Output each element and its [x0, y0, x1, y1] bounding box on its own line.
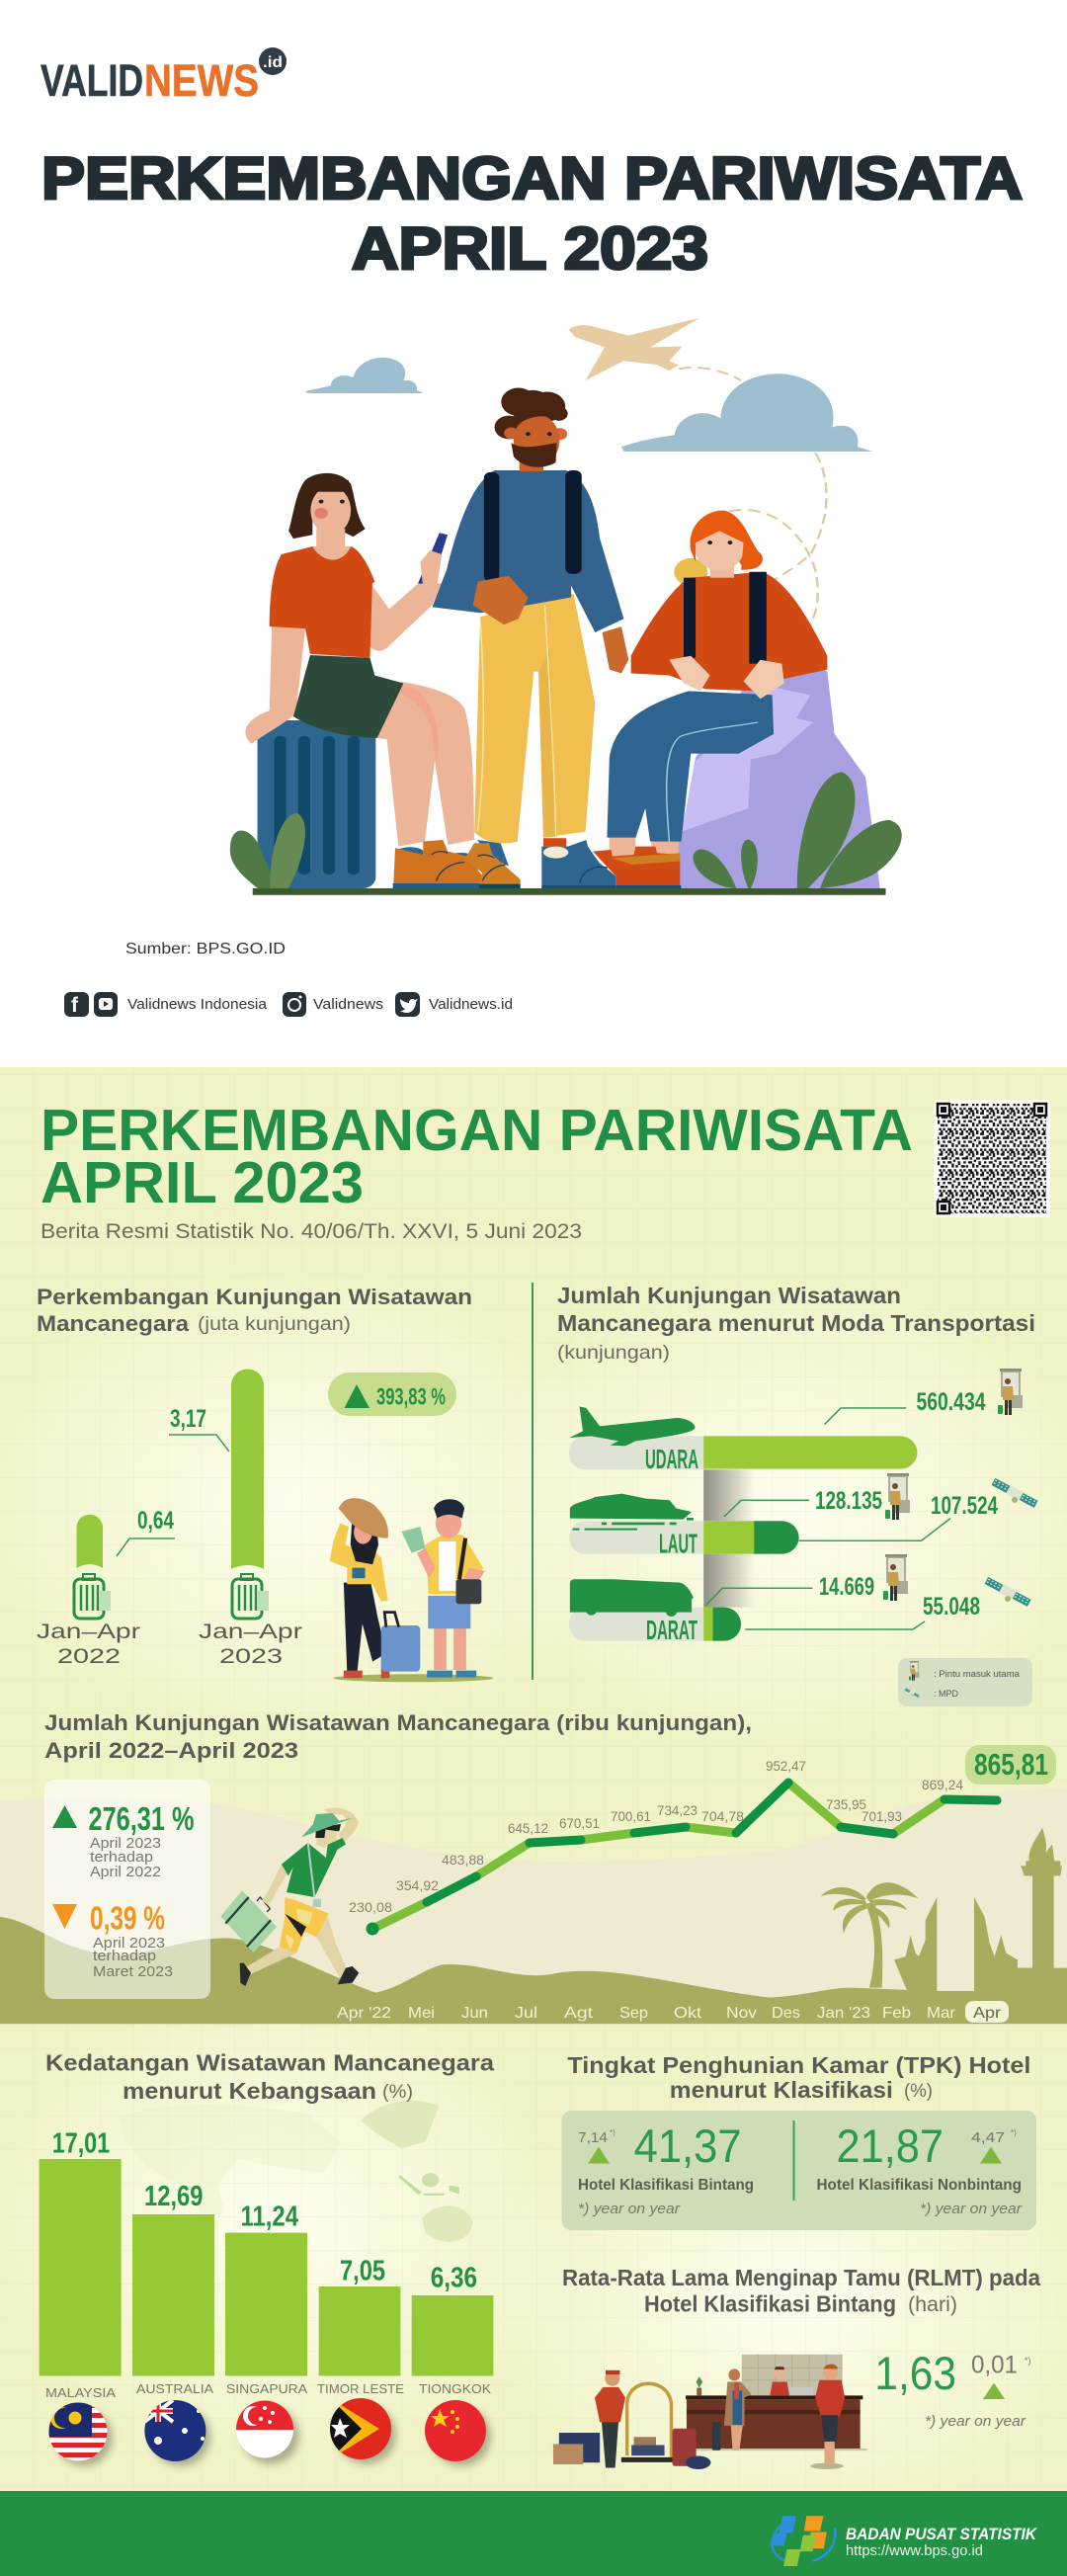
- axis label 2022: [37, 1620, 140, 1668]
- monument: [1021, 1827, 1062, 1969]
- source text: Sumber: BPS.GO.ID: [125, 941, 286, 957]
- skyline: palm, temple, monument: [821, 1827, 1062, 1996]
- values: 7,05: [340, 2255, 385, 2286]
- flag shadows: [55, 2405, 491, 2466]
- footer text: BADAN PUSAT STATISTIK: [846, 2525, 1038, 2543]
- data labels: 735,95: [826, 1797, 866, 1812]
- data labels: 701,93: [862, 1809, 902, 1824]
- line segments: [372, 1783, 997, 1929]
- month axis: [337, 2001, 1009, 2023]
- month axis: Jul: [515, 2005, 537, 2022]
- heading: monthly arrivals: April 2022–April 2023: [44, 1738, 298, 1763]
- social links: Validnews.id: [429, 996, 513, 1013]
- landscape background: [0, 1788, 1067, 2024]
- icon: satellite laut: [991, 1477, 1038, 1509]
- icon: gate udara: [998, 1369, 1023, 1415]
- value 3,17: [169, 1405, 229, 1452]
- icon: gate laut: [885, 1473, 910, 1520]
- month axis: Nov: [726, 2005, 757, 2022]
- start marker: [366, 1923, 379, 1935]
- label DARAT: DARAT: [646, 1615, 698, 1645]
- data labels: 734,23: [657, 1803, 698, 1818]
- heading: arrivals: (juta kunjungan): [198, 1314, 351, 1335]
- star hotel: *) year on year: [578, 2201, 681, 2217]
- plant: [697, 2376, 702, 2395]
- illustration: hotel lobby: [553, 2355, 867, 2469]
- growth pill: 393,83 %: [376, 1383, 446, 1411]
- grey label pills and shadows: [569, 1406, 950, 1641]
- up change: [52, 1800, 194, 1880]
- shirt: [282, 1838, 346, 1897]
- icon: right cloud: [621, 374, 872, 452]
- palm: [821, 1882, 919, 1988]
- bar 2023: [231, 1370, 264, 1569]
- icon: suitcase 2022: [74, 1574, 111, 1619]
- rock: [636, 640, 880, 888]
- icon: flag Malaysia: [48, 2402, 108, 2461]
- value: length of stay: 1,63: [874, 2347, 956, 2399]
- value laut pintu: 128.135: [815, 1487, 882, 1515]
- heading: hotel occupancy: (%): [904, 2081, 933, 2102]
- hills: [0, 1917, 1067, 2024]
- data labels: 354,92: [396, 1878, 439, 1893]
- footer text: [846, 2525, 1038, 2559]
- data labels: 483,88: [442, 1853, 484, 1868]
- month axis: Sep: [619, 2005, 648, 2022]
- icon: youtube: [94, 992, 118, 1017]
- legs: [242, 1947, 296, 1976]
- bars: [703, 1436, 917, 1469]
- month axis: Jun: [461, 2005, 488, 2022]
- footer band: [0, 2491, 1067, 2576]
- main title: [41, 145, 1023, 282]
- values: 17,01: [52, 2128, 110, 2160]
- value darat pintu: 14.669: [819, 1573, 874, 1601]
- heading: length of stay: Rata-Rata Lama Menginap Tamu (RLMT) pada: [562, 2265, 1040, 2290]
- value: length of stay: *): [1025, 2356, 1031, 2366]
- decorative world map: [120, 2101, 473, 2242]
- logo: Validnews: [41, 47, 287, 106]
- label UDARA: UDARA: [645, 1444, 698, 1474]
- value darat MPD: 55.048: [923, 1593, 980, 1620]
- month axis: Feb: [882, 2005, 911, 2022]
- panel: hotel occupancy: [562, 2111, 1036, 2230]
- axis label 2022: 2022: [57, 1645, 121, 1668]
- footer text: https://www.bps.go.id: [846, 2542, 983, 2559]
- stats box: [44, 1780, 210, 1999]
- hat: [301, 1813, 354, 1837]
- man: [401, 1499, 485, 1678]
- data labels: 700,61: [611, 1809, 651, 1824]
- bars: [40, 2159, 493, 2375]
- leaves: [230, 772, 902, 888]
- star hotel: *): [610, 2128, 616, 2137]
- icon: facebook: [64, 992, 89, 1017]
- value 3,17: 3,17: [170, 1405, 206, 1433]
- value 0,64: [117, 1507, 175, 1556]
- icon: left cloud: [305, 358, 424, 393]
- logo: Validnews: VALID: [41, 55, 143, 106]
- country labels: AUSTRALIA: [136, 2381, 213, 2396]
- social links: [64, 992, 513, 1017]
- main title: APRIL 2023: [352, 215, 708, 282]
- up change: April 2022: [90, 1865, 161, 1880]
- dashed flight path: [679, 368, 826, 624]
- value: length of stay: *) year on year: [925, 2413, 1026, 2430]
- values: 12,69: [144, 2181, 204, 2212]
- data labels: 952,47: [766, 1759, 806, 1774]
- heading: length of stay: (hari): [908, 2293, 957, 2316]
- shoes: [240, 1963, 251, 1986]
- icon: twitter: [395, 992, 420, 1017]
- traveller illustration: [220, 1807, 359, 1986]
- temple gate: [894, 1897, 937, 1991]
- divider: [532, 1283, 534, 1680]
- down change: [52, 1900, 173, 1980]
- highlighted value: 865,81: [974, 1747, 1048, 1782]
- heading: nationality: (%): [382, 2082, 413, 2103]
- axis label 2023: [199, 1620, 302, 1668]
- value udara: 560.434: [917, 1388, 986, 1416]
- heading: transport mode: Jumlah Kunjungan Wisatawan: [557, 1283, 901, 1308]
- month axis: Mei: [408, 2005, 435, 2022]
- value: length of stay: 0,01: [971, 2352, 1018, 2379]
- icon: facebook: f: [71, 994, 79, 1017]
- illustration: three travellers: [230, 318, 902, 895]
- heading: monthly arrivals: Jumlah Kunjungan Wisatawan Mancanegara (ribu kunjungan),: [44, 1710, 752, 1735]
- icon: ship silhouette: [570, 1494, 694, 1531]
- country labels: TIMOR LESTE: [317, 2381, 404, 2396]
- icon: flag China: [425, 2400, 486, 2461]
- icon: flag Timor Leste: [330, 2398, 391, 2459]
- month axis: Apr: [973, 2005, 1002, 2022]
- month axis: Agt: [564, 2005, 594, 2022]
- axis label 2023: 2023: [219, 1645, 283, 1668]
- heading: hotel occupancy: menurut Klasifikasi: [670, 2077, 893, 2103]
- month axis: Jan '23: [817, 2005, 870, 2022]
- value: length of stay: [874, 2347, 1031, 2430]
- down change: April 2023: [93, 1936, 165, 1952]
- legend: [898, 1658, 1032, 1706]
- icon: BPS logo: [772, 2516, 835, 2566]
- star hotel: 7,14: [578, 2129, 608, 2146]
- data labels: [349, 1759, 963, 1915]
- heading: transport mode: Mancanegara menurut Moda Transportasi: [557, 1310, 1035, 1336]
- heading: length of stay: [562, 2265, 1040, 2316]
- illustration: tourist couple: [330, 1498, 493, 1682]
- woman: [330, 1498, 420, 1678]
- icon: suitcase 2023: [232, 1574, 269, 1619]
- non-star hotel: 21,87: [836, 2119, 944, 2172]
- icon: flag Australia: [144, 2400, 207, 2461]
- logo: Validnews: NEWS: [144, 55, 259, 106]
- receptionist: [770, 2367, 813, 2395]
- non-star hotel: [816, 2119, 1023, 2217]
- lighter leaf: [270, 813, 305, 888]
- heading: arrivals: Mancanegara: [37, 1311, 190, 1336]
- icon: plane: [569, 318, 699, 380]
- icon: bus silhouette: [570, 1579, 694, 1617]
- data labels: 704,78: [701, 1809, 744, 1824]
- leader lines: [705, 1408, 950, 1629]
- month axis: Okt: [674, 2005, 702, 2022]
- up change: terhadap: [90, 1850, 153, 1866]
- luggage cart: [621, 2383, 673, 2462]
- country labels: MALAYSIA: [45, 2385, 116, 2400]
- down change: terhadap: [93, 1949, 156, 1964]
- heading: length of stay: Hotel Klasifikasi Bintang: [644, 2290, 896, 2316]
- growth pill: [328, 1372, 456, 1416]
- arms: [262, 1865, 287, 1905]
- values: 11,24: [241, 2202, 298, 2233]
- woman right: [593, 511, 827, 888]
- heading: transport mode: [557, 1283, 1035, 1364]
- value laut MPD: 107.524: [931, 1492, 998, 1520]
- icon: flag Singapore: [236, 2400, 293, 2458]
- infographic title: [41, 1098, 913, 1243]
- data labels: 230,08: [349, 1900, 392, 1915]
- suitcase: [220, 1890, 277, 1953]
- down change: 0,39 %: [90, 1900, 165, 1937]
- icon: instagram: [283, 992, 306, 1017]
- heading: arrivals: Perkembangan Kunjungan Wisatawan: [37, 1285, 472, 1309]
- up change: 276,31 %: [89, 1800, 194, 1837]
- heading: nationality: menurut Kebangsaan: [123, 2078, 376, 2104]
- desk: [686, 2395, 867, 2451]
- suitcases: [553, 2429, 710, 2469]
- star hotel: Hotel Klasifikasi Bintang: [578, 2177, 754, 2194]
- heading: nationality: [45, 2049, 494, 2104]
- chart: arrivals 2022 vs 2023: [37, 1370, 456, 1668]
- data labels: 869,24: [922, 1778, 963, 1792]
- legend: : Pintu masuk utama: [934, 1669, 1020, 1679]
- social links: Validnews Indonesia: [127, 996, 268, 1013]
- values: [52, 2128, 477, 2294]
- chart: transport mode: [569, 1369, 1038, 1706]
- logo: Validnews: .id: [263, 54, 283, 71]
- heading: transport mode: (kunjungan): [557, 1343, 670, 1364]
- QR code: [934, 1100, 1050, 1217]
- social links: Validnews: [313, 996, 383, 1013]
- month axis: Apr '22: [337, 2005, 391, 2022]
- label LAUT: LAUT: [659, 1529, 698, 1559]
- non-star hotel: Hotel Klasifikasi Nonbintang: [816, 2177, 1022, 2194]
- values: 6,36: [431, 2263, 477, 2294]
- star hotel: 41,37: [634, 2119, 742, 2172]
- country labels: TIONGKOK: [419, 2381, 491, 2396]
- legend: : MPD: [934, 1689, 958, 1699]
- bellboy: [595, 2370, 625, 2468]
- data labels: 645,12: [508, 1821, 548, 1836]
- data labels: 670,51: [559, 1816, 600, 1831]
- legs and shoes: [375, 682, 521, 888]
- white top background: [0, 0, 1067, 1067]
- infographic title: Berita Resmi Statistik No. 40/06/Th. XXVI, 5 Juni 2023: [41, 1220, 582, 1243]
- value 0,64: 0,64: [137, 1507, 174, 1535]
- bar 2022: [77, 1515, 103, 1568]
- non-star hotel: *): [1011, 2128, 1017, 2137]
- ground: [253, 888, 886, 895]
- infographic title: PERKEMBANGAN PARIWISATA: [41, 1098, 913, 1163]
- heading: hotel occupancy: Tingkat Penghunian Kamar (TPK) Hotel: [567, 2052, 1030, 2078]
- woman left: [245, 473, 521, 888]
- up change: April 2023: [90, 1836, 161, 1852]
- country labels: [45, 2381, 491, 2400]
- main title: PERKEMBANGAN PARIWISATA: [41, 145, 1023, 211]
- infographic background panel: [0, 1067, 1067, 2520]
- month axis: Des: [772, 2005, 800, 2022]
- icon: plane silhouette: [569, 1406, 696, 1446]
- guest: [712, 2368, 751, 2451]
- heading: hotel occupancy: [567, 2052, 1030, 2103]
- down change: Maret 2023: [93, 1964, 173, 1980]
- suitcase: [258, 720, 375, 888]
- line chart: [337, 1745, 1056, 2023]
- heading: monthly arrivals: [44, 1710, 752, 1763]
- man: [433, 388, 628, 888]
- icon: gate darat: [883, 1554, 908, 1601]
- shorts: [280, 1897, 329, 1953]
- month axis: Mar: [927, 2005, 956, 2022]
- head: [316, 1828, 338, 1848]
- star hotel: [578, 2119, 754, 2217]
- heading: arrivals: [37, 1285, 472, 1336]
- non-star hotel: 4,47: [971, 2129, 1005, 2146]
- axis label 2023: Jan–Apr: [199, 1620, 302, 1643]
- staff: [810, 2365, 845, 2469]
- bar chart: nationality: [40, 2128, 493, 2466]
- non-star hotel: *) year on year: [920, 2201, 1023, 2217]
- country labels: SINGAPURA: [226, 2381, 307, 2396]
- axis label 2022: Jan–Apr: [37, 1620, 140, 1643]
- icon: satellite darat: [984, 1576, 1031, 1608]
- infographic title: APRIL 2023: [41, 1150, 364, 1215]
- heading: nationality: Kedatangan Wisatawan Mancanegara: [45, 2049, 494, 2075]
